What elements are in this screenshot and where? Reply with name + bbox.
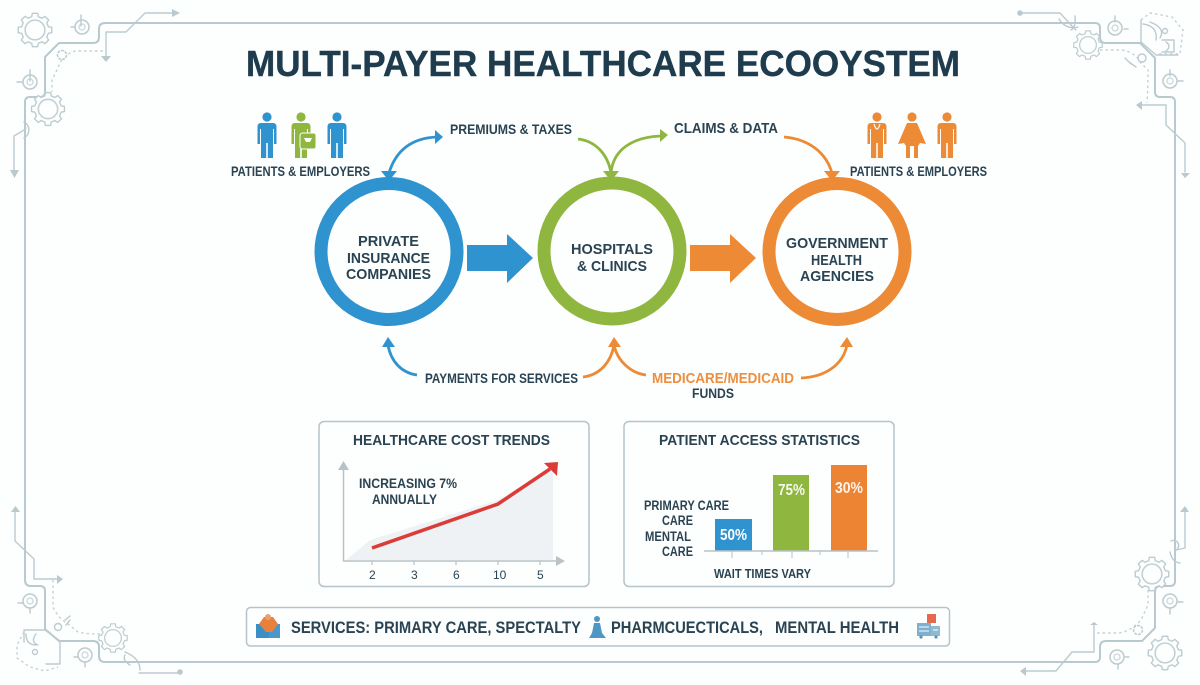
label: patients and employers: PATIENTS & EMPLOYERS xyxy=(231,163,370,179)
bar chart xyxy=(704,465,878,558)
node: government health agencies xyxy=(769,184,905,320)
label: claims and data: CLAIMS & DATA xyxy=(674,120,778,137)
node: private insurance companies xyxy=(321,184,457,320)
icon: seated figure xyxy=(589,616,606,638)
corner: top right circuit decoration xyxy=(1017,10,1190,178)
arrow: blue flow to hospitals xyxy=(467,234,533,283)
chart annotation: ANNUALLY xyxy=(372,491,438,507)
arrow: blue premiums double-headed xyxy=(381,130,443,181)
bar chart: 30% xyxy=(835,480,863,497)
arrow: blue payments to insurers xyxy=(382,337,417,375)
node: private insurance companies: PRIVATE xyxy=(358,233,419,250)
group: right patients and employers xyxy=(850,112,987,179)
bar chart: 50% xyxy=(720,527,747,544)
panel: patient access statistics xyxy=(624,422,894,586)
node: government health agencies: AGENCIES xyxy=(800,268,874,285)
line chart: 6 xyxy=(453,568,460,582)
corner: top left circuit decoration xyxy=(10,9,180,178)
node: private insurance companies: COMPANIES xyxy=(346,266,431,283)
line chart: 3 xyxy=(411,568,418,582)
bar chart labels: CARE xyxy=(662,513,693,528)
icon: orange person xyxy=(938,112,956,158)
node: government health agencies: HEALTH xyxy=(811,252,862,269)
icon: orange doctor xyxy=(868,112,886,158)
node: hospitals and clinics: HOSPITALS xyxy=(571,241,653,258)
bar chart labels: CARE xyxy=(662,544,693,559)
panel heading: HEALTHCARE COST TRENDS xyxy=(353,432,550,449)
chart annotation xyxy=(359,475,457,507)
icon: ambulance and clinic xyxy=(917,614,940,639)
arrow: orange payments and medicare into hospitals xyxy=(583,337,646,377)
line chart xyxy=(338,461,565,582)
icon: blue person xyxy=(328,112,346,158)
line chart: 5 xyxy=(537,568,544,582)
bar chart: 75% xyxy=(778,482,805,499)
bar chart labels: PRIMARY CARE xyxy=(644,498,729,513)
node: private insurance companies: INSURANCE xyxy=(347,250,430,267)
title: MULTI-PAYER HEALTHCARE ECOOYSTEM xyxy=(246,43,960,84)
caption: wait times vary: WAIT TIMES VARY xyxy=(714,566,811,581)
arrow: orange claims to government xyxy=(784,137,840,181)
chart annotation: INCREASING 7% xyxy=(359,475,457,491)
arrow: green premiums into hospitals and up to claims xyxy=(578,129,668,181)
label: premiums and taxes: PREMIUMS & TAXES xyxy=(450,121,572,137)
panel: healthcare cost trends xyxy=(319,422,589,586)
label: medicare and medicaid funds: MEDICARE/MEDICAID xyxy=(652,371,794,387)
corner: bottom left circuit decoration xyxy=(11,506,183,675)
corner: bottom right circuit decoration xyxy=(1020,506,1189,676)
icon: green person with badge xyxy=(292,112,316,158)
label: medicare and medicaid funds: FUNDS xyxy=(692,385,734,401)
icon: blue person xyxy=(258,112,276,158)
panel: services bar xyxy=(246,608,950,646)
mental health text: MENTAL HEALTH xyxy=(775,618,899,637)
label: payments for services: PAYMENTS FOR SERVICES xyxy=(425,370,578,386)
node: hospitals and clinics: & CLINICS xyxy=(577,258,647,275)
line chart: 2 xyxy=(369,568,376,582)
bar chart labels xyxy=(644,498,729,559)
line chart: 10 xyxy=(493,568,507,582)
node: hospitals and clinics xyxy=(544,183,680,319)
group: left patients and employers xyxy=(231,112,370,179)
arrow: orange medicare to government xyxy=(801,337,853,378)
panel heading: PATIENT ACCESS STATISTICS xyxy=(659,432,860,449)
arrow: orange flow to government xyxy=(690,234,756,283)
pharmaceuticals text: PHARMCUECTICALS, xyxy=(611,618,763,637)
label: patients and employers: PATIENTS & EMPLOYERS xyxy=(850,163,987,179)
bar chart labels: MENTAL xyxy=(645,529,691,544)
icon: services people xyxy=(256,614,280,638)
services text: SERVICES: PRIMARY CARE, SPECTALTY xyxy=(291,618,582,637)
node: government health agencies: GOVERNMENT xyxy=(786,235,888,252)
icon: orange woman xyxy=(898,112,926,158)
label: medicare and medicaid funds xyxy=(652,371,794,401)
